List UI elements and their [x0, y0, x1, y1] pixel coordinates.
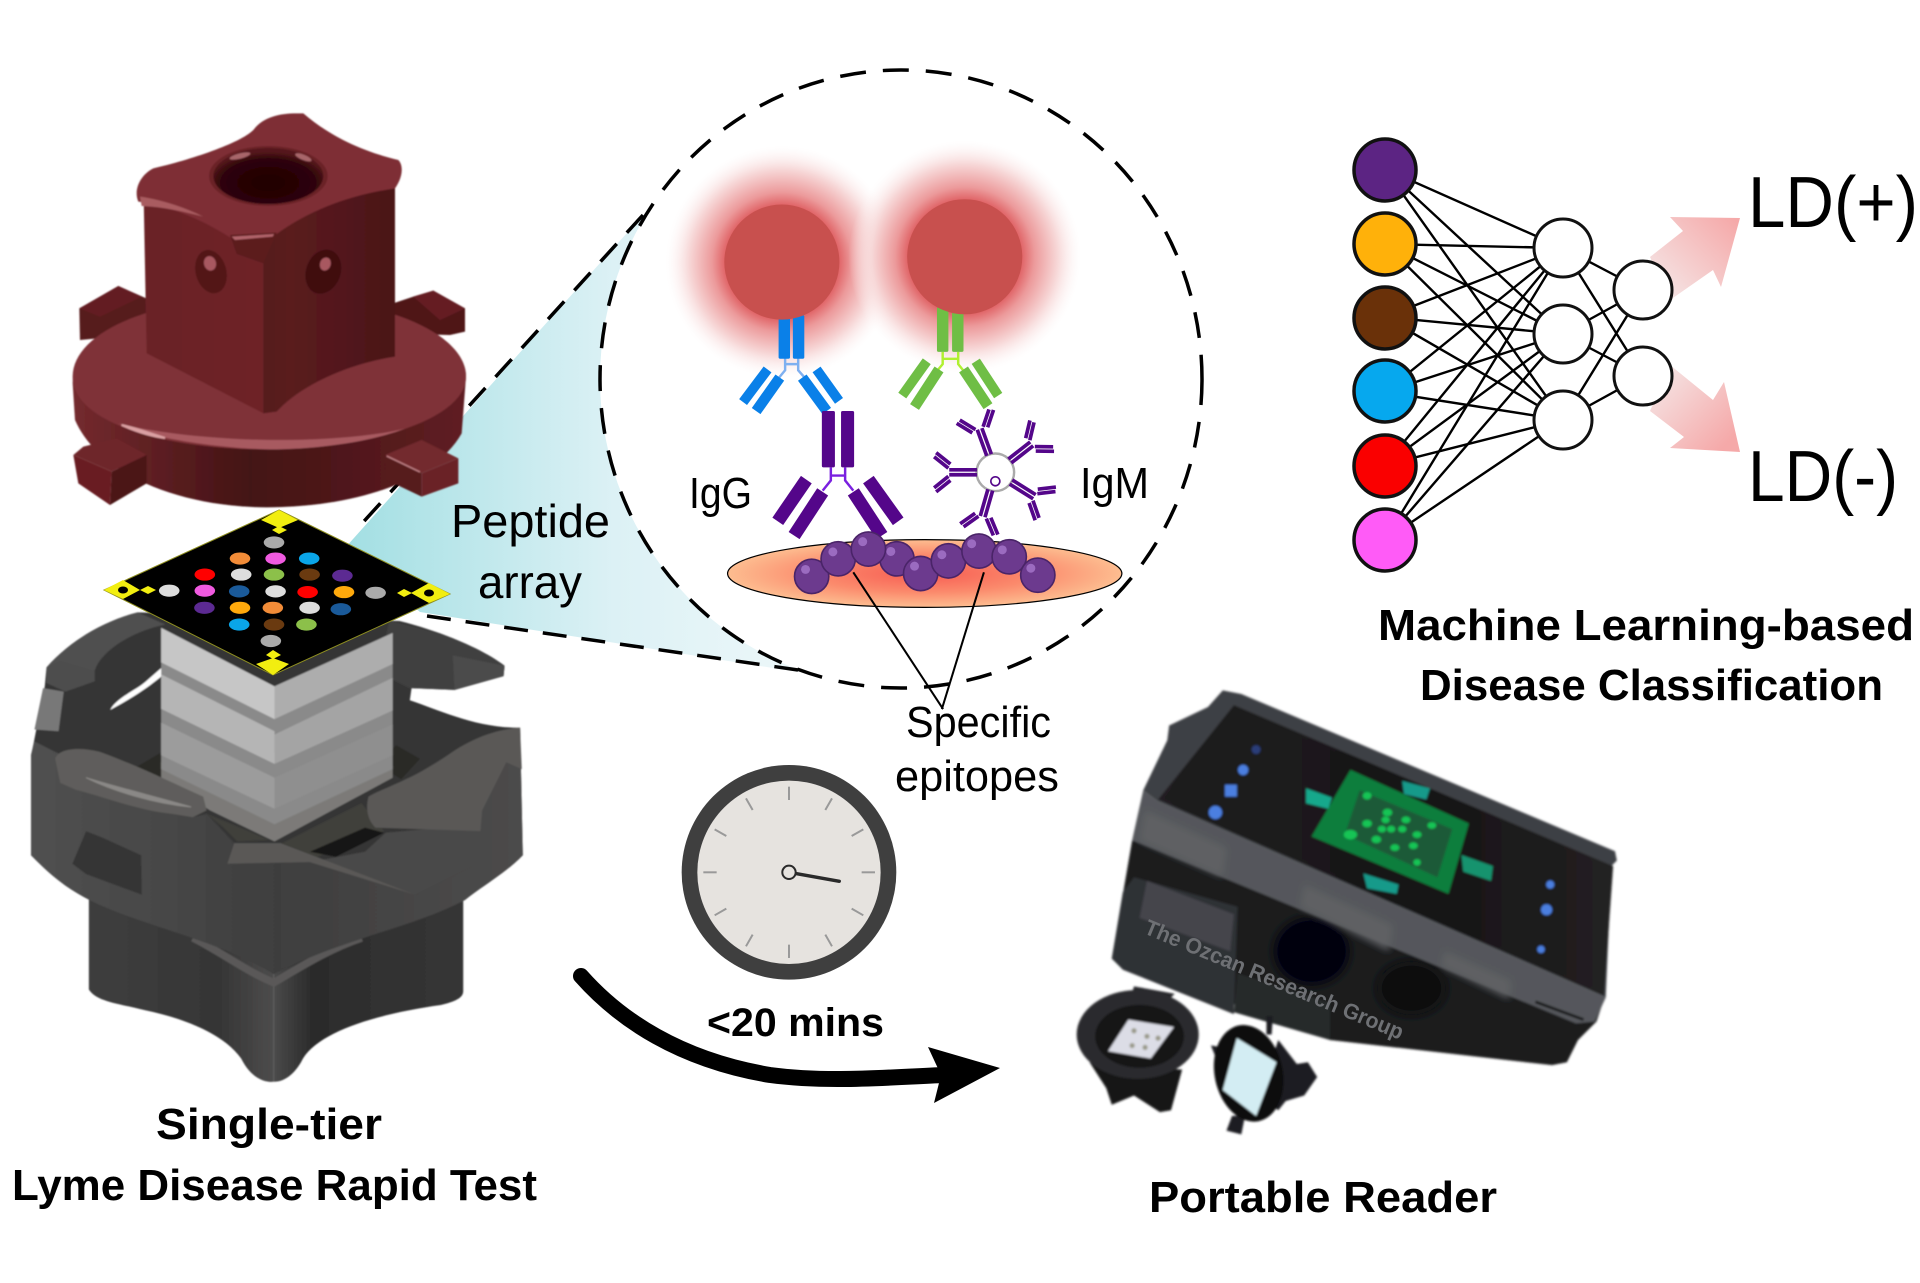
label: disease classification: Disease Classification — [1420, 661, 1883, 710]
textured grey band — [1132, 790, 1606, 1023]
base disc side — [73, 297, 466, 507]
ring side window — [72, 831, 142, 895]
label: lyme disease rapid test: Lyme Disease Rapid Test — [12, 1161, 537, 1210]
base disc top — [73, 297, 466, 449]
label: peptide array: Peptide — [451, 495, 610, 547]
side card slot — [1535, 1002, 1584, 1020]
ring front floor plate — [310, 824, 480, 895]
label: specific epitopes: Specific — [906, 698, 1051, 747]
reader slot — [1140, 881, 1234, 951]
blue detection antibody — [743, 315, 839, 411]
ring silhouette — [31, 612, 523, 974]
epitope plate — [728, 540, 1122, 607]
fluorescent glows — [666, 140, 1081, 378]
white gap in ring — [110, 667, 166, 710]
neural network diagram — [1354, 139, 1740, 571]
phone bezel — [1143, 690, 1617, 997]
reader body — [1112, 840, 1604, 1065]
phone screen — [1158, 705, 1613, 996]
peptide array zoom cone — [345, 70, 1202, 688]
red nanoparticle right — [907, 199, 1022, 314]
front left lug — [73, 438, 147, 505]
label: igm: IgM — [1080, 459, 1149, 508]
zoom cone dashed guide lines — [356, 215, 798, 670]
back right arc — [379, 621, 505, 690]
label: peptide array: array — [478, 556, 582, 608]
purple igg antibody — [778, 411, 898, 536]
label: igg: IgG — [689, 469, 752, 518]
label: specific epitopes — [895, 698, 1059, 801]
network connections — [1385, 169, 1643, 540]
column top corner — [230, 233, 277, 263]
label: machine learning-based: Machine Learning-based — [1378, 601, 1914, 650]
clock icon — [682, 765, 896, 980]
front right arc — [367, 728, 522, 831]
chip yellow alignment markers — [104, 510, 450, 675]
label: specific epitopes: epitopes — [895, 752, 1059, 801]
chip marker holes — [118, 586, 434, 596]
front right lug — [385, 440, 458, 497]
label: single-tier: Single-tier — [156, 1100, 382, 1149]
device engraved text: The Ozcan Research Group — [1141, 915, 1407, 1044]
inner floor — [133, 745, 420, 857]
label: under 20 mins: <20 mins — [707, 1001, 884, 1045]
label: peptide array — [451, 495, 610, 608]
red nanoparticle left — [724, 205, 839, 320]
clock hand — [789, 872, 839, 881]
dark grey test cassette base — [31, 612, 523, 1082]
screen green spots — [1344, 792, 1436, 866]
screen app icons — [1209, 745, 1554, 953]
red cap top part of cassette — [73, 113, 466, 507]
input nodes — [1354, 139, 1416, 571]
bead highlights — [801, 537, 1035, 574]
back left arc top — [46, 612, 165, 671]
small cassette right — [1205, 1016, 1317, 1134]
body shadow patches — [1275, 918, 1445, 1014]
purple igm pentamer — [934, 408, 1058, 537]
grey absorbent pad stack — [161, 628, 393, 824]
label: ld negative: LD(-) — [1748, 437, 1898, 517]
peptide array chip — [104, 510, 450, 675]
column right face — [263, 173, 395, 413]
back lugs — [79, 286, 465, 340]
epitope pointer lines — [853, 572, 984, 709]
small cassette left — [1077, 986, 1199, 1112]
portable reader device photo — [1077, 690, 1617, 1134]
screen green test image — [1306, 770, 1493, 894]
cap hole — [209, 146, 328, 206]
curved time arrow — [581, 976, 1000, 1103]
clock ticks — [703, 787, 875, 958]
ring front body — [31, 728, 523, 974]
output arrows — [1650, 217, 1740, 452]
zoom circle fill — [600, 70, 1202, 688]
disc rim highlight — [118, 423, 405, 449]
zoom circle dashed outline — [600, 70, 1202, 688]
column dimples — [190, 244, 347, 299]
front left arc — [55, 749, 207, 817]
column top face — [137, 113, 402, 237]
green detection antibody — [902, 307, 998, 407]
left tab — [46, 661, 95, 692]
label: portable reader: Portable Reader — [1149, 1173, 1497, 1222]
chip colored dots — [159, 536, 386, 647]
purple peptide beads — [795, 532, 1055, 594]
column left face — [143, 180, 270, 413]
hidden and output nodes — [1534, 219, 1672, 449]
immunoassay illustration — [666, 140, 1122, 709]
band texture patches — [1140, 811, 1511, 999]
knob lower body — [89, 893, 463, 1082]
